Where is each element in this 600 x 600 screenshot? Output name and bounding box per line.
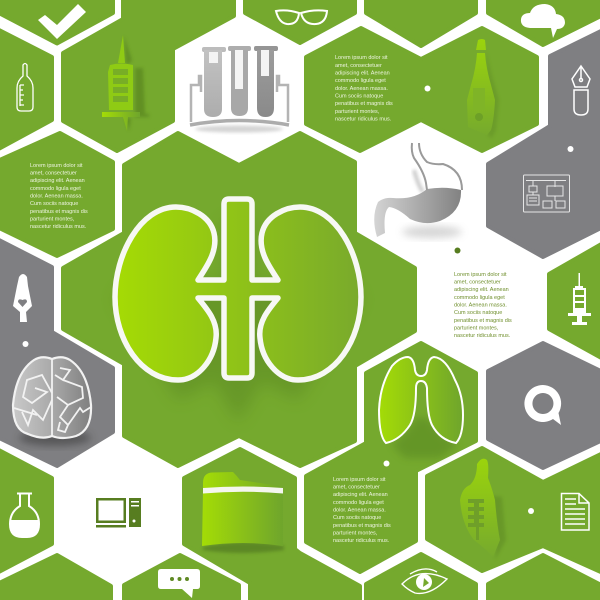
text block: left: Cum sociis natoque <box>30 201 78 207</box>
text block: right on white: nascetur ridiculus mus. <box>454 333 511 339</box>
icon: eye <box>402 569 447 593</box>
icon: stomach <box>374 143 462 238</box>
text block: top centre: commodo ligula eget <box>335 78 386 84</box>
text block: top centre: nascetur ridiculus mus. <box>335 117 392 123</box>
hexagon: bottom thermometer <box>427 448 600 574</box>
hexagon: eye <box>366 554 476 600</box>
text block: top centre: penatibus et magnis dis <box>335 101 393 107</box>
hexagon: pen and flowchart <box>488 29 600 257</box>
icon: white syringe <box>568 273 591 325</box>
text block: right on white <box>454 272 512 339</box>
icon: flowchart <box>524 175 570 212</box>
gray hexagons <box>0 29 600 468</box>
hexagon: search <box>488 343 600 468</box>
text block: bottom centre: commodo ligula eget <box>333 500 384 506</box>
hexagon: flask <box>0 448 52 574</box>
icon: glasses <box>276 10 327 24</box>
icon: green syringe <box>102 35 149 131</box>
icon: thermometer outline <box>17 64 33 111</box>
icon: document <box>562 494 589 530</box>
text block: right on white: parturient montes, <box>454 326 499 332</box>
text block: left: penatibus et magnis dis <box>30 209 88 215</box>
text block: left: adipiscing elit. Aenean <box>30 178 85 184</box>
hexagon: checkmark <box>0 0 113 44</box>
hexagon: lungs and text <box>306 343 476 572</box>
text block: top centre: parturient montes, <box>335 109 380 115</box>
text block: top centre: amet, consectetuer <box>335 63 382 69</box>
text block: bottom centre: Cum sociis natoque <box>333 515 381 521</box>
icon: woman figure <box>13 274 32 322</box>
hexagon: text and thermometer top <box>306 28 537 151</box>
text block: right on white: amet, consectetuer <box>454 280 501 286</box>
icon: fountain pen <box>572 66 590 115</box>
text block: top centre: Cum sociis natoque <box>335 94 383 100</box>
icon: folder <box>202 472 284 553</box>
icon: green digital thermometer <box>467 39 499 138</box>
text block: top centre: Lorem ipsum dolor sit <box>335 55 388 61</box>
icon: chat bubble <box>158 569 200 598</box>
icon: green bottom thermometer <box>460 459 506 560</box>
icon: checkmark <box>38 4 86 39</box>
text block: left: nascetur ridiculus mus. <box>30 224 87 230</box>
text block: top centre: dolor. Aenean massa. <box>335 86 388 92</box>
text block: right on white: commodo ligula eget <box>454 295 505 301</box>
text block: right on white: Lorem ipsum dolor sit <box>454 272 507 278</box>
text block: bottom centre: amet, consectetuer <box>333 484 380 490</box>
icon: magnifier speech <box>524 385 561 425</box>
hexagon: bottom right <box>488 555 600 600</box>
text block: bottom centre: penatibus et magnis dis <box>333 523 391 529</box>
hexagon: bottom left <box>0 555 111 600</box>
text block: bottom centre <box>333 477 391 544</box>
hexagon: chat <box>124 555 239 600</box>
text block: right on white: dolor. Aenean massa. <box>454 302 507 308</box>
hexagon: folder <box>184 449 360 600</box>
text block: bottom centre: dolor. Aenean massa. <box>333 508 386 514</box>
icon: kidneys <box>115 199 361 422</box>
hexagon: kidney <box>63 133 415 466</box>
hexagon: thermometer outline <box>0 28 52 151</box>
hexagon: green syringe <box>63 0 234 151</box>
icon: cloud with tail <box>521 4 565 38</box>
text block: right on white: Cum sociis natoque <box>454 310 502 316</box>
icon: brain <box>13 357 91 446</box>
text block: right on white: penatibus et magnis dis <box>454 318 512 324</box>
hexagon: cloud <box>488 0 600 45</box>
icon: flask <box>9 492 40 538</box>
text block: top centre: adipiscing elit. Aenean <box>335 71 390 77</box>
hexagon: text left <box>0 133 113 256</box>
text block: left: dolor. Aenean massa. <box>30 194 83 200</box>
text block: left: Lorem ipsum dolor sit <box>30 163 83 169</box>
text block: left: parturient montes, <box>30 216 75 222</box>
dots <box>22 86 574 514</box>
text block: right on white: adipiscing elit. Aenean <box>454 287 509 293</box>
icon: lungs <box>379 357 463 458</box>
text block: bottom centre: Lorem ipsum dolor sit <box>333 477 386 483</box>
hexagon: glasses <box>245 0 355 43</box>
text block: bottom centre: adipiscing elit. Aenean <box>333 492 388 498</box>
text block: left: commodo ligula eget <box>30 186 81 192</box>
icon: test tubes <box>190 46 289 132</box>
text block: left: amet, consectetuer <box>30 170 77 176</box>
text block: bottom centre: parturient montes, <box>333 530 378 536</box>
text block: left <box>30 163 88 230</box>
text block: top centre <box>335 55 393 123</box>
hexagon: woman and brain <box>0 238 113 466</box>
hexagon: top blank <box>366 0 476 46</box>
text block: bottom centre: nascetur ridiculus mus. <box>333 538 390 544</box>
hexagon: right syringe <box>549 242 600 360</box>
icon: computer <box>96 498 141 528</box>
